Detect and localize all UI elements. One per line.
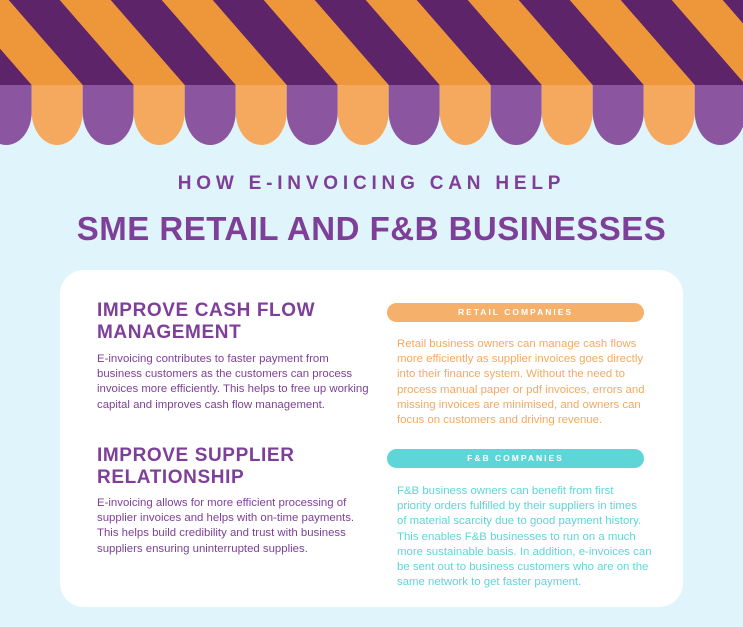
pill: F&B [387, 449, 644, 468]
heading: supplier: RELATIONSHIP [97, 467, 244, 488]
card [60, 270, 683, 607]
text: cash flow: capital and improves cash flow management. [97, 399, 325, 411]
text: supplier [97, 497, 354, 555]
pill: retail [387, 303, 644, 322]
text: supplier: suppliers ensuring uninterrupted supplies. [97, 543, 308, 555]
text: F&B: F&B business owners can benefit from first [397, 485, 614, 497]
text: retail: into their finance system. Without the need to [397, 368, 625, 380]
text: F&B: of material scarcity due to good payment history. [397, 515, 641, 527]
text: retail: Retail business owners can manage cash flows [397, 338, 636, 350]
text: F&B: more sustainable basis. In addition, e-invoices can [397, 546, 652, 558]
text: cash flow: invoices more efficiently. This helps to free up working [97, 383, 369, 395]
text: F&B [397, 485, 652, 588]
text: supplier: E-invoicing allows for more efficient processing of [97, 497, 346, 509]
text: supplier: This helps build credibility and trust with business [97, 527, 346, 539]
subtitle: HOW E-INVOICING CAN HELP [178, 173, 565, 194]
text: cash flow [97, 353, 369, 411]
text: F&B: be sent out to business customers who are on the [397, 561, 648, 573]
text: retail: more efficiently as supplier invoices goes directly [397, 353, 643, 365]
pill: retail: RETAIL COMPANIES [458, 307, 573, 317]
text: F&B: same network to get faster payment. [397, 576, 581, 588]
text: retail: process manual paper or pdf invoices, errors and [397, 384, 645, 396]
text: F&B: priority orders fulfilled by their suppliers in times [397, 500, 637, 512]
text: supplier: supplier invoices and helps with on-time payments. [97, 512, 354, 524]
awning [0, 0, 743, 145]
heading: cash flow: IMPROVE CASH FLOW [97, 300, 315, 321]
heading: supplier: IMPROVE SUPPLIER [97, 445, 295, 466]
pill: F&B: F&B COMPANIES [467, 453, 564, 463]
text: retail: missing invoices are minimised, and owners can [397, 399, 641, 411]
text: cash flow: E-invoicing contributes to faster payment from [97, 353, 329, 365]
text: retail [397, 338, 645, 426]
heading: cash flow: MANAGEMENT [97, 322, 241, 343]
text: cash flow: business customers as the customers can process [97, 368, 352, 380]
text: retail: focus on customers and driving revenue. [397, 414, 602, 426]
heading: cash flow [97, 300, 315, 343]
heading: supplier [97, 445, 295, 488]
title: SME RETAIL AND F&B BUSINESSES [77, 210, 666, 247]
text: F&B: This enables F&B businesses to run on a much [397, 531, 636, 543]
